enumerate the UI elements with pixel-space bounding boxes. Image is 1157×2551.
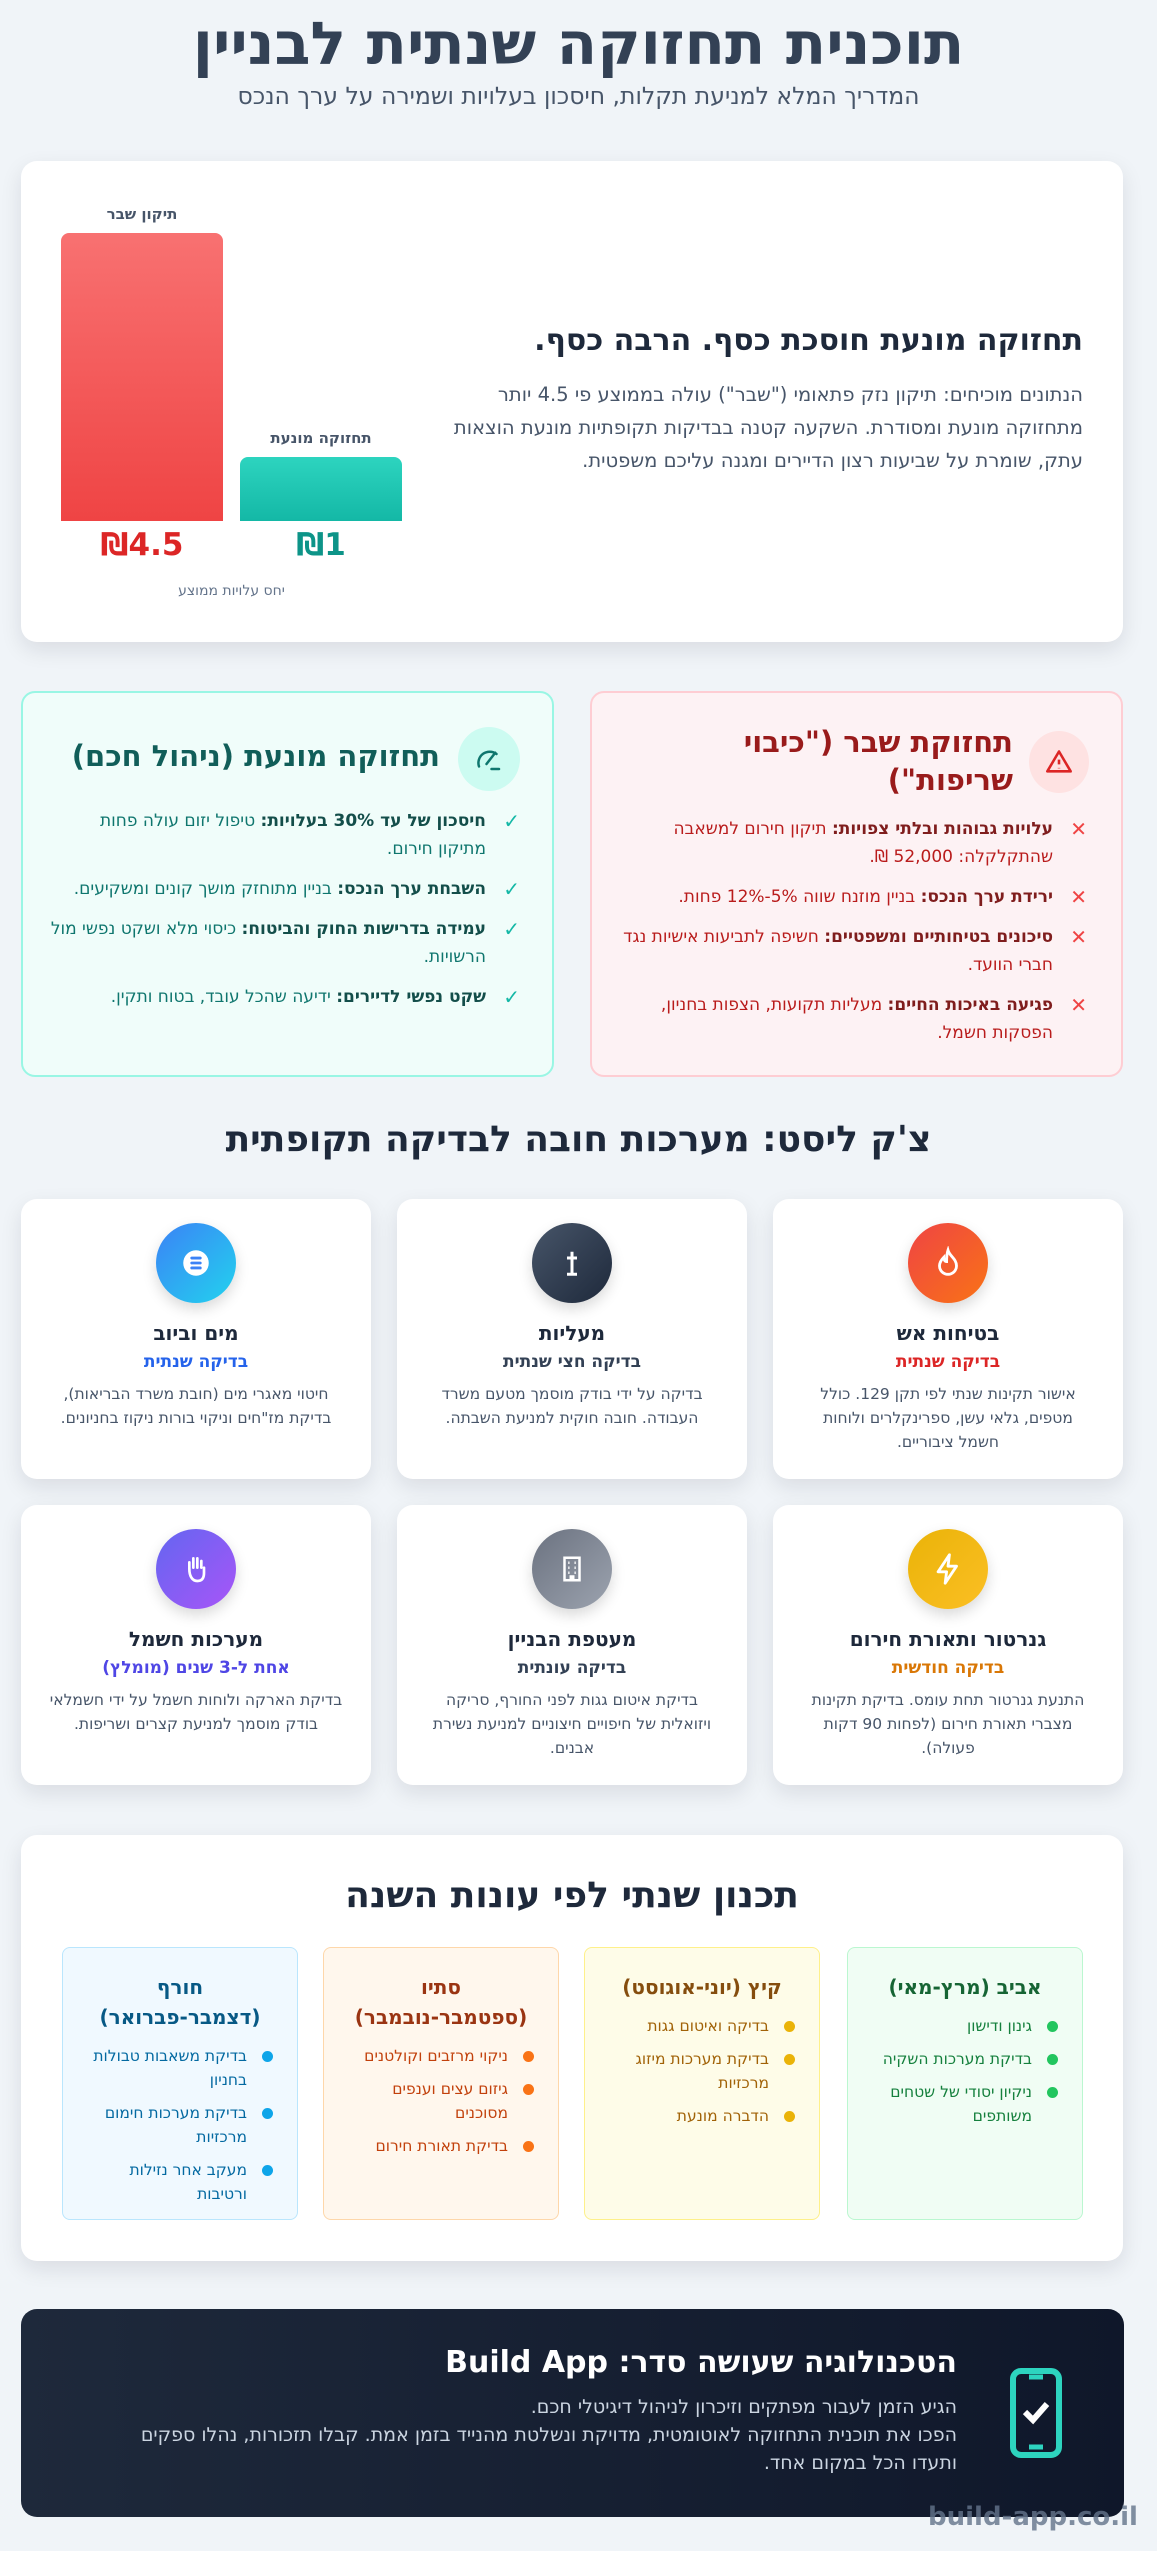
season: autumn (323, 1947, 559, 2220)
bar chart (61, 205, 402, 599)
list: preventive benefits: ✓ (503, 877, 520, 901)
list: breakdown drawbacks: ✕ (1070, 993, 1087, 1017)
season: summer: בדיקה ואיטום גגות (647, 2017, 769, 2035)
season: summer: בדיקת מערכות מיזוג מרכזיות (636, 2050, 769, 2092)
list: breakdown drawbacks: פגיעה באיכות החיים: מעליות תקועות, הצפות בחניון, הפסקות חשמל. (661, 995, 1053, 1043)
season: spring: אביב (מרץ-מאי) (888, 1975, 1042, 1999)
text: water: מים וביוב (153, 1321, 239, 1345)
heading: seasonal: תכנון שנתי לפי עונות השנה (345, 1875, 799, 1916)
text: envelope: בדיקת איטום גגות לפני החורף, סריקה ויזואלית של חיפויים חיצוניים למניעת נשירת אבנים. (433, 1691, 711, 1757)
list: preventive benefits: עמידה בדרישות החוק והביטוח: כיסוי מלא ושקט נפשי מול הרשויות. (51, 919, 486, 967)
icon: water (156, 1223, 236, 1303)
list: preventive benefits: השבחת ערך הנכס: בניין מתוחזק מושך קונים ומשקיעים. (74, 879, 486, 899)
text: build app description: ותעדו הכל במקום אחד. (764, 2452, 957, 2474)
panel: Build App footer (21, 2309, 1124, 2517)
heading: savings: תחזוקה מונעת חוסכת כסף. הרבה כסף. (534, 323, 1083, 358)
card: fire safety (773, 1199, 1123, 1479)
icon: bolt (908, 1529, 988, 1609)
list: preventive benefits: חיסכון של עד 30% בעלויות: טיפול יזום עולה פחות מתיקון חירום. (100, 811, 486, 859)
card: water (21, 1199, 371, 1479)
bar: repair (61, 233, 223, 521)
text: generator: בדיקה חודשית (892, 1658, 1004, 1678)
list: preventive benefits: ✓ (503, 985, 520, 1009)
text: elevators (441, 1321, 703, 1427)
value: 4.5: ₪4.5 (101, 527, 183, 563)
text: fire: בטיחות אש (897, 1321, 999, 1345)
icon: phone check (1010, 2368, 1062, 2458)
icon: warning (1029, 731, 1089, 793)
season: spring (847, 1947, 1083, 2220)
text: savings explanation: הנתונים מוכיחים: תיקון נזק פתאומי ("שבר") עולה בממוצע פי 4.5 יותר מתחזוקה מונעת ומסודרת. השקעה קטנה בבדיקות תקופתיות מונעת הוצאות עתק, שומרת על שביעות רצון הדיירים ומגנה עליכם משפטית. (454, 383, 1083, 472)
text: build app description: הפכו את תוכנית התחזוקה לאוטומטית, מדויקת ונשלטת מהנייד בזמן אמת. קבלו תזכורות, נהלו ספקים (141, 2424, 957, 2446)
text: water (61, 1321, 331, 1427)
list: breakdown drawbacks: ✕ (1070, 925, 1087, 949)
text: electrical: מערכות חשמל (129, 1627, 263, 1651)
season: winter: מעקב אחר נזילות ורטיבות (129, 2161, 247, 2203)
text: fire: בדיקה שנתית (896, 1352, 1000, 1372)
heading: checklist: צ'ק ליסט: מערכות חובה לבדיקה תקופתית (226, 1119, 931, 1160)
card: electrical (21, 1505, 371, 1785)
panel: seasonal plan (21, 1835, 1123, 2261)
panel: breakdown maintenance (590, 691, 1123, 1077)
list: breakdown drawbacks: עלויות גבוהות ובלתי צפויות: תיקון חירום למשאבה שהתקלקלה: 52,000 ₪. (673, 819, 1053, 867)
bar label: repair: תיקון שבר (107, 205, 177, 223)
heading: preventive: תחזוקה מונעת (ניהול חכם) (72, 739, 440, 773)
season: winter: בדיקת משאבות טבולות בחניון (93, 2047, 247, 2089)
icon: hand (156, 1529, 236, 1609)
list: preventive benefits: ✓ (503, 917, 520, 941)
text: envelope (433, 1627, 711, 1757)
list: preventive benefits (51, 809, 520, 1009)
text: elevators: בדיקה חצי שנתית (503, 1352, 641, 1372)
text: elevators: מעליות (539, 1321, 605, 1345)
heading: breakdown: תחזוקת שבר ("כיבוי שריפות") (744, 725, 1013, 797)
season: autumn: גיזום עצים וענפים מסוכנים (392, 2080, 508, 2122)
text: electrical (50, 1627, 342, 1733)
text: generator (812, 1627, 1084, 1757)
panel: cost comparison (21, 161, 1123, 642)
season: winter: (דצמבר-פברואר) (100, 2005, 260, 2029)
watermark: build-app.co.il (928, 2502, 1138, 2532)
season: winter (62, 1947, 298, 2220)
icon: gauge (458, 727, 520, 791)
text: fire: אישור תקינות שנתי לפי תקן 129. כולל מטפים, גלאי עשן, ספרינקלרים ולוחות חשמל ציבוריים. (820, 1385, 1076, 1451)
icon: building (532, 1529, 612, 1609)
season: winter: חורף (157, 1975, 203, 1999)
text: electrical: אחת ל-3 שנים (מומלץ) (102, 1658, 290, 1678)
season: autumn: ניקוי מרזבים וקולטנים (364, 2047, 508, 2065)
text: envelope: מעטפת הבניין (508, 1627, 636, 1651)
text: fire (820, 1321, 1076, 1451)
text: generator: גנרטור ותאורת חירום (850, 1627, 1046, 1651)
season: spring: ניקיון יסודי של שטחים משותפים (890, 2083, 1032, 2125)
card: generator (773, 1505, 1123, 1785)
text: build app description (141, 2396, 957, 2474)
text: electrical: בדיקת הארקה ולוחות חשמל על ידי חשמלאי בודק מוסמך למניעת קצרים ושריפות. (50, 1691, 342, 1733)
season: winter: בדיקת מערכות חימום מרכזיות (105, 2104, 247, 2146)
value: 1: ₪1 (296, 527, 346, 563)
text: water: חיטוי מאגרי מים (חובת משרד הבריאות), בדיקת מז"חים וניקוי בורות ניקוז בחניונים. (61, 1385, 331, 1427)
list: breakdown drawbacks (623, 817, 1087, 1043)
list: preventive benefits: שקט נפשי לדיירים: ידיעה שהכל עובד, בטוח ותקין. (111, 987, 486, 1007)
panel: preventive maintenance (21, 691, 554, 1077)
season: autumn: (ספטמבר-נובמבר) (355, 2005, 527, 2029)
season: autumn: סתיו (421, 1975, 461, 1999)
season: summer: קיץ (יוני-אוגוסט) (622, 1975, 782, 1999)
bar: preventive (240, 457, 402, 521)
season: spring: גינון ודישון (967, 2017, 1032, 2035)
season: summer: הדברה מונעת (677, 2107, 769, 2125)
text: elevators: בדיקה על ידי בודק מוסמך מטעם משרד העבודה. חובה חוקית למניעת השבתה. (441, 1385, 703, 1427)
chart caption: יחס עלויות ממוצע (178, 583, 285, 599)
icon: elevator (532, 1223, 612, 1303)
text: envelope: בדיקה עונתית (518, 1658, 626, 1678)
list: breakdown drawbacks: ✕ (1070, 885, 1087, 909)
bar label: preventive: תחזוקה מונעת (270, 429, 372, 447)
list: breakdown drawbacks: סיכונים בטיחותיים ומשפטיים: חשיפה לתביעות אישיות נגד חברי הוועד. (623, 927, 1053, 975)
text: generator: התנעת גנרטור תחת עומס. בדיקת תקינות מצברי תאורת חירום (לפחות 90 דקות פעולה). (812, 1691, 1084, 1757)
list: breakdown drawbacks: ירידת ערך הנכס: בניין מוזנח שווה 5%-12% פחות. (678, 887, 1053, 907)
text: build app description: הגיע הזמן לעבור מפתקים וזיכרון לניהול דיגיטלי חכם. (531, 2396, 957, 2418)
text: water: בדיקה שנתית (144, 1352, 248, 1372)
title: תוכנית תחזוקה שנתית לבניין (193, 9, 964, 78)
list: breakdown drawbacks: ✕ (1070, 817, 1087, 841)
subtitle: המדריך המלא למניעת תקלות, חיסכון בעלויות ושמירה על ערך הנכס (237, 82, 920, 110)
card: elevators (397, 1199, 747, 1479)
card: envelope (397, 1505, 747, 1785)
season: spring: בדיקת מערכות השקיה (883, 2050, 1032, 2068)
icon: fire (908, 1223, 988, 1303)
season: autumn: בדיקת תאורת חירום (376, 2137, 508, 2155)
season: summer (584, 1947, 820, 2220)
list: preventive benefits: ✓ (503, 809, 520, 833)
heading: build app: הטכנולוגיה שעושה סדר: Build App (445, 2345, 957, 2380)
